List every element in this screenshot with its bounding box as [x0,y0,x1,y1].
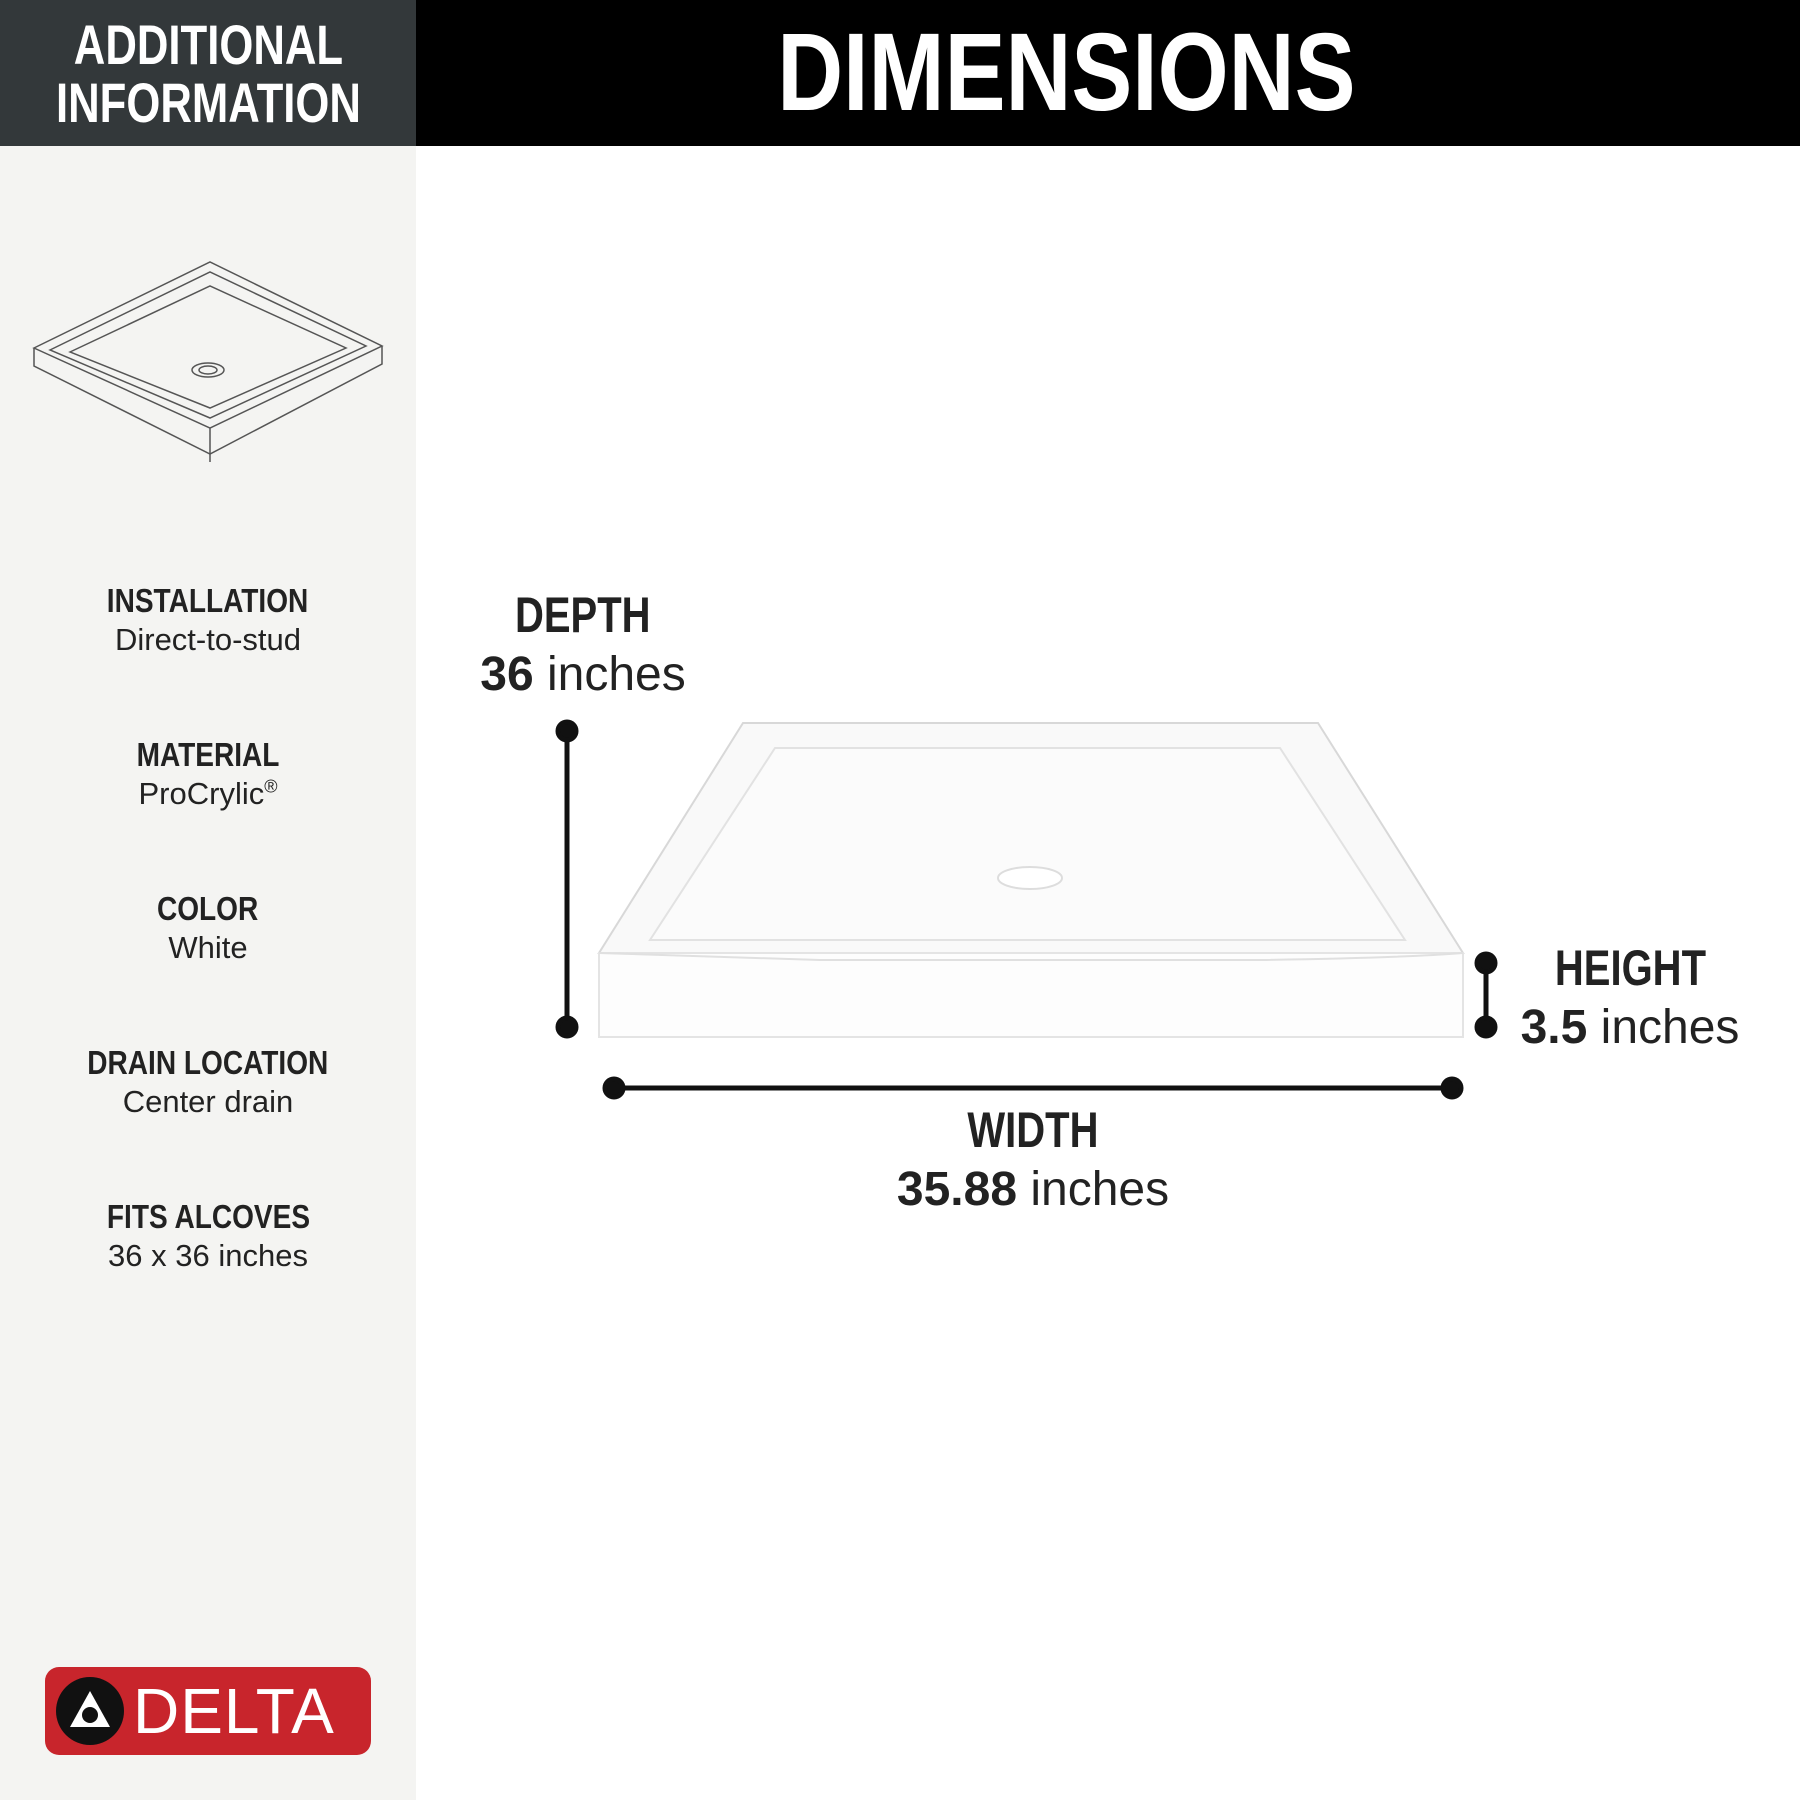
width label [897,1102,1169,1216]
shower base product drawing [597,722,1465,1038]
width label: 35.88 inches [897,1163,1169,1216]
info: fits alcoves: FITS ALCOVES [106,1198,310,1235]
width label: WIDTH [967,1102,1099,1158]
info: color [157,890,259,965]
height label: 3.5 inches [1521,1001,1739,1054]
height label: HEIGHT [1554,940,1706,996]
height label [1521,940,1739,1054]
info: fits alcoves: 36 x 36 inches [108,1238,308,1273]
sidebar header [0,0,416,146]
info: drain location: DRAIN LOCATION [87,1044,329,1081]
info: color: COLOR [157,890,259,927]
main header: DIMENSIONS [777,11,1355,134]
info: fits alcoves [106,1198,310,1273]
info: color: White [168,930,248,965]
info: material: MATERIAL [137,736,279,773]
info: material [137,736,279,811]
depth label: 36 inches [480,648,686,701]
sidebar header: ADDITIONAL [73,13,343,76]
delta logo: DELTA [133,1675,335,1747]
info: installation: Direct-to-stud [115,622,301,657]
main header [416,0,1800,146]
info: material: ProCrylic® [138,776,278,811]
info: installation: INSTALLATION [107,582,309,619]
depth label [480,587,686,701]
info: installation [107,582,309,657]
sidebar background [0,0,416,1800]
sidebar header: INFORMATION [56,71,360,134]
depth label: DEPTH [515,587,651,643]
info: drain location [87,1044,329,1119]
delta logo [45,1667,371,1755]
info: drain location: Center drain [123,1084,293,1119]
thumbnail: shower base line drawing [32,261,384,462]
